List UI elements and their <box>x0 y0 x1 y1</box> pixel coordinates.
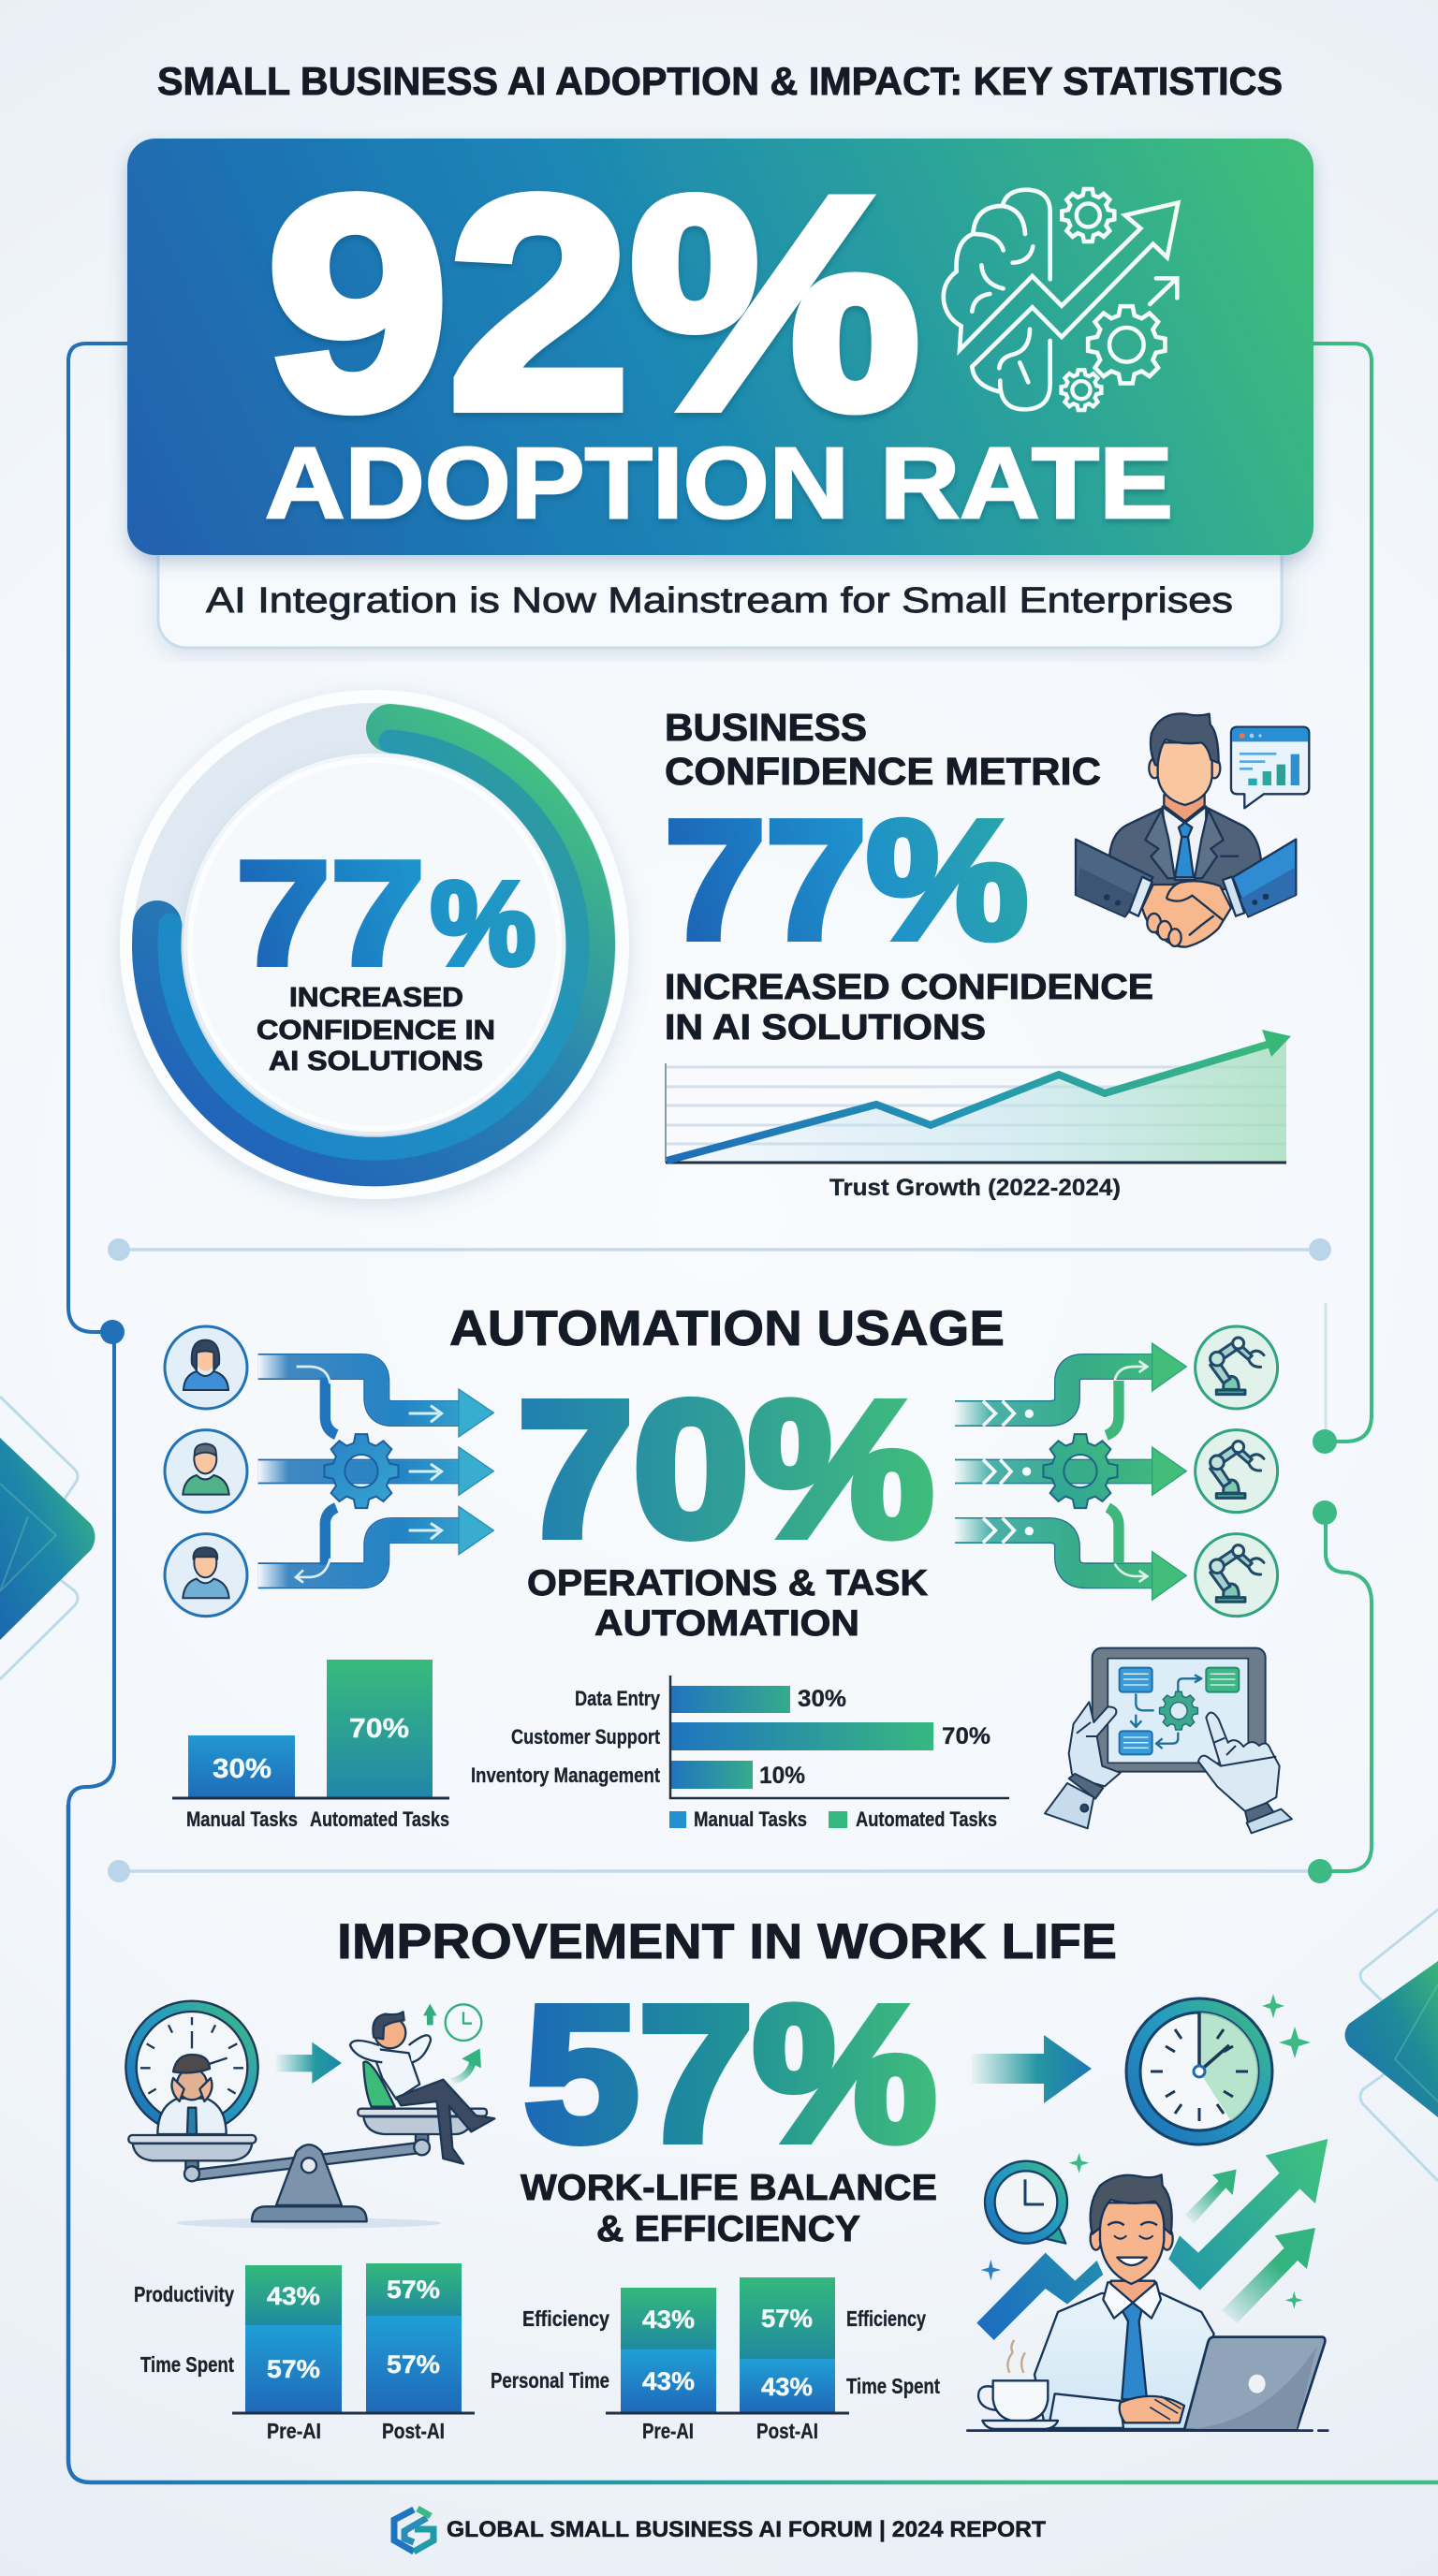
stacked bars: efficiency vs personal time <box>491 2277 940 2443</box>
horizontal bar chart: task categories: Inventory Management <box>471 1764 661 1787</box>
hero banner <box>127 136 1313 555</box>
arrow to clock <box>972 2035 1092 2103</box>
donut ring <box>120 690 629 1199</box>
scale trays and beam <box>128 2109 487 2221</box>
mini clock and growth arrows <box>423 2004 481 2082</box>
bar chart: manual vs automated: 30% <box>213 1754 271 1784</box>
icon: robot 2 <box>1196 1430 1278 1513</box>
arrow: bottom flow <box>258 1506 493 1583</box>
donut value 77%: % <box>431 857 536 989</box>
legend <box>669 1808 997 1831</box>
left robot hand <box>1045 1702 1121 1828</box>
icon: robot 3 <box>1196 1534 1278 1617</box>
icon: robot 1 <box>1196 1326 1278 1409</box>
bar chart: manual vs automated: Automated Tasks <box>310 1808 449 1831</box>
stacked bars: efficiency vs personal time: Pre-AI <box>642 2419 694 2443</box>
stacked bars: productivity vs time spent: 57% <box>387 2350 440 2378</box>
stacked bars: efficiency vs personal time: Efficiency <box>522 2306 609 2331</box>
icon: chart speech bubble <box>1231 727 1309 808</box>
frame connector: right green circuit line <box>1311 344 1372 1871</box>
legend: Manual Tasks <box>694 1808 807 1831</box>
horizontal bar chart: task categories: 30% <box>798 1686 846 1712</box>
relaxed man <box>350 2012 431 2107</box>
panel: automation usage <box>165 1301 1292 1833</box>
icon: forum logo <box>394 2509 433 2552</box>
donut caption: AI SOLUTIONS <box>269 1046 483 1076</box>
automated flow: gear and arrows to robots <box>955 1326 1278 1617</box>
horizontal bar chart: task categories: Data Entry <box>575 1687 661 1710</box>
arrow: top flow <box>955 1343 1186 1435</box>
heading: AUTOMATION USAGE <box>449 1301 1005 1356</box>
value 57%: 57% <box>524 1967 936 2181</box>
footer text: GLOBAL SMALL BUSINESS AI FORUM | 2024 REPORT <box>447 2517 1046 2542</box>
sparkles <box>1069 2153 1303 2309</box>
stacked bars: efficiency vs personal time: 43% <box>642 2305 695 2334</box>
bar chart: manual vs automated: 70% <box>349 1714 409 1744</box>
title: SMALL BUSINESS AI ADOPTION & IMPACT: KEY STATISTICS <box>157 59 1283 103</box>
laptop and desk <box>967 2337 1328 2431</box>
stacked bars: productivity vs time spent: 43% <box>267 2282 320 2310</box>
stacked bars: productivity vs time spent: Pre-AI <box>267 2419 321 2443</box>
panel: confidence donut <box>120 690 629 1199</box>
panel: business confidence metric <box>665 706 1309 1201</box>
bar chart: manual vs automated: Manual Tasks <box>186 1808 298 1831</box>
caption <box>665 968 1153 1047</box>
coffee cup <box>978 2340 1058 2429</box>
growth arrows <box>976 2139 1328 2340</box>
arrow: middle flow <box>258 1447 493 1495</box>
divider 2 <box>108 1859 1332 1883</box>
right robot hand <box>1198 1713 1292 1833</box>
heading: CONFIDENCE METRIC <box>665 750 1101 793</box>
decorative right diamond <box>1344 1910 1438 2181</box>
icon: happy worker with laptop and growth arrows <box>967 2139 1328 2431</box>
stacked bars: efficiency vs personal time: Efficiency <box>846 2306 926 2331</box>
stacked bars: productivity vs time spent <box>134 2263 475 2443</box>
caption <box>521 2168 937 2249</box>
arrow: bottom flow <box>955 1508 1186 1600</box>
icon: businessman handshake <box>1076 713 1309 947</box>
heading <box>665 706 1101 793</box>
hero figure 92%: 92% <box>267 136 920 472</box>
icon: person 1 <box>165 1326 247 1409</box>
icon: person 2 <box>165 1430 247 1513</box>
caption: IN AI SOLUTIONS <box>665 1008 986 1047</box>
stacked bars: productivity vs time spent: 57% <box>387 2276 440 2304</box>
horizontal bar chart: task categories: Customer Support <box>511 1725 661 1749</box>
caption <box>527 1563 928 1644</box>
stacked bars: productivity vs time spent: 57% <box>267 2355 320 2383</box>
heading: IMPROVEMENT IN WORK LIFE <box>337 1914 1117 1969</box>
stacked bars: productivity vs time spent: Post-AI <box>382 2419 445 2443</box>
footer <box>394 2509 1046 2552</box>
arrow: middle flow <box>955 1447 1186 1495</box>
horizontal bar chart: task categories: 10% <box>759 1763 805 1789</box>
stressed clock <box>125 2001 258 2134</box>
stacked bars: efficiency vs personal time: 43% <box>642 2367 695 2395</box>
adoption rate label: ADOPTION RATE <box>265 426 1173 539</box>
donut value 77%: 77 <box>236 831 425 996</box>
caption: WORK-LIFE BALANCE <box>521 2168 937 2208</box>
stacked bars: efficiency vs personal time: 57% <box>761 2305 813 2333</box>
caption: AUTOMATION <box>594 1603 859 1644</box>
value 77%: 77% <box>665 786 1028 974</box>
line chart: trust growth <box>666 1030 1291 1163</box>
frame connector: left blue circuit line <box>68 344 1438 2482</box>
caption: INCREASED CONFIDENCE <box>665 968 1153 1007</box>
legend: Automated Tasks <box>856 1808 997 1831</box>
value 70%: 70% <box>518 1362 933 1576</box>
donut caption <box>257 983 495 1076</box>
arrow: top flow <box>258 1367 493 1437</box>
worker body <box>1034 2174 1214 2429</box>
clock bubble <box>985 2161 1067 2244</box>
icon: clock with sparkles <box>1126 1994 1311 2144</box>
icon: blue gear <box>324 1434 398 1508</box>
decorative left diamond <box>0 1397 95 1679</box>
icon: green gear <box>1043 1434 1118 1508</box>
subtitle text: AI Integration is Now Mainstream for Small Enterprises <box>206 581 1233 621</box>
panel: improvement in work life <box>125 1914 1328 2443</box>
donut caption: CONFIDENCE IN <box>257 1016 495 1046</box>
stacked bars: efficiency vs personal time: Personal Time <box>491 2368 609 2393</box>
horizontal bar chart: task categories <box>471 1676 1009 1831</box>
icon: person 3 <box>165 1534 247 1617</box>
heading: BUSINESS <box>665 706 867 749</box>
stacked bars: productivity vs time spent: Productivity <box>134 2282 234 2306</box>
caption: OPERATIONS & TASK <box>527 1563 928 1603</box>
stacked bars: productivity vs time spent: Time Spent <box>140 2352 234 2377</box>
icon: robot hands on tablet <box>1045 1648 1292 1833</box>
divider 1 <box>108 1238 1331 1261</box>
stacked bars: efficiency vs personal time: Post-AI <box>756 2419 818 2443</box>
caption: & EFFICIENCY <box>596 2209 860 2249</box>
stacked bars: efficiency vs personal time: Time Spent <box>846 2374 940 2398</box>
donut caption: INCREASED <box>289 983 463 1013</box>
horizontal bar chart: task categories: 70% <box>942 1723 990 1749</box>
donut value 77% <box>236 831 536 996</box>
mini arrow <box>276 2042 342 2084</box>
subtitle box <box>158 505 1282 648</box>
stacked bars: efficiency vs personal time: 43% <box>761 2373 813 2401</box>
icon: brain, growth arrow and gears <box>944 189 1178 410</box>
bar chart: manual vs automated <box>172 1660 449 1831</box>
relaxed man legs <box>396 2080 494 2164</box>
manual flow: people through gear with arrows <box>165 1326 493 1617</box>
icon: work-life scale <box>125 2001 494 2229</box>
chart caption: Trust Growth (2022-2024) <box>829 1175 1121 1201</box>
